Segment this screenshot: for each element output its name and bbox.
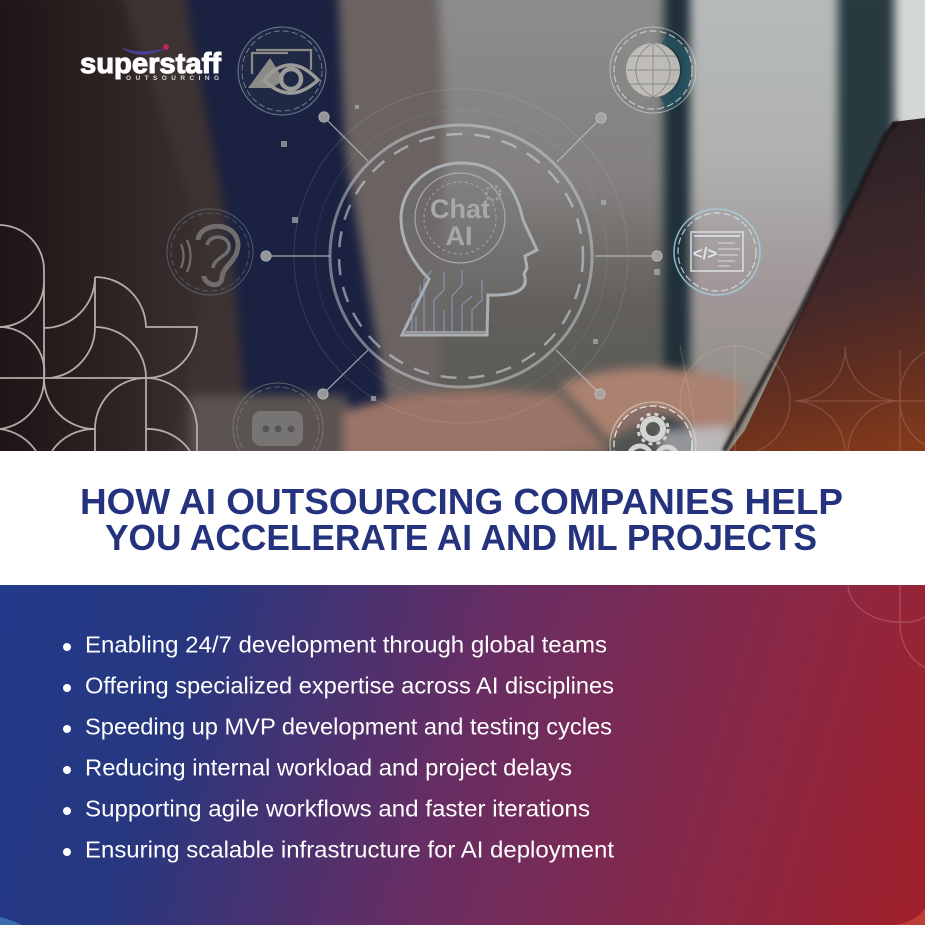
photo: person typing on a laptop [0, 0, 925, 488]
geometric line pattern: left [0, 225, 197, 451]
icon: AI head: AI [446, 221, 472, 251]
bullet list [63, 632, 615, 862]
panel: gradient list background [0, 585, 925, 925]
item 6: Ensuring scalable infrastructure for AI deployment [85, 836, 615, 862]
icon: vision [238, 27, 326, 115]
panel corner accent: left [0, 917, 22, 925]
icon: ear [167, 209, 253, 295]
decorative small squares [281, 105, 660, 401]
icon: AI head [401, 163, 537, 335]
item 4: Reducing internal workload and project delays [85, 754, 572, 780]
item 5: Supporting agile workflows and faster iterations [85, 796, 590, 822]
panel corner accent: right [895, 908, 925, 925]
central HUD rings [294, 89, 628, 423]
title band [0, 451, 925, 585]
title [80, 481, 843, 558]
logo: superstaff [80, 48, 221, 80]
connector lines and nodes [261, 112, 662, 399]
icon: code window [674, 209, 760, 295]
icon: gears [610, 402, 696, 451]
title: HOW AI OUTSOURCING COMPANIES HELP [80, 481, 843, 522]
item 1: Enabling 24/7 development through global teams [85, 632, 607, 658]
item 2: Offering specialized expertise across AI disciplines [85, 672, 614, 698]
title: YOU ACCELERATE AI AND ML PROJECTS [105, 517, 817, 558]
icon: chat bubble [232, 382, 324, 451]
icon: code window: </> [693, 244, 717, 263]
laptop lid [722, 118, 925, 460]
geometric line pattern: right [680, 345, 925, 456]
item 3: Speeding up MVP development and testing cycles [85, 714, 612, 740]
logo swoosh [120, 47, 166, 55]
geometric line pattern: panel [848, 585, 925, 668]
logo: OUTSOURCING [126, 75, 219, 82]
laptop edge [724, 122, 898, 451]
icon: AI head: Chat [430, 194, 490, 224]
icon: globe [610, 27, 696, 113]
